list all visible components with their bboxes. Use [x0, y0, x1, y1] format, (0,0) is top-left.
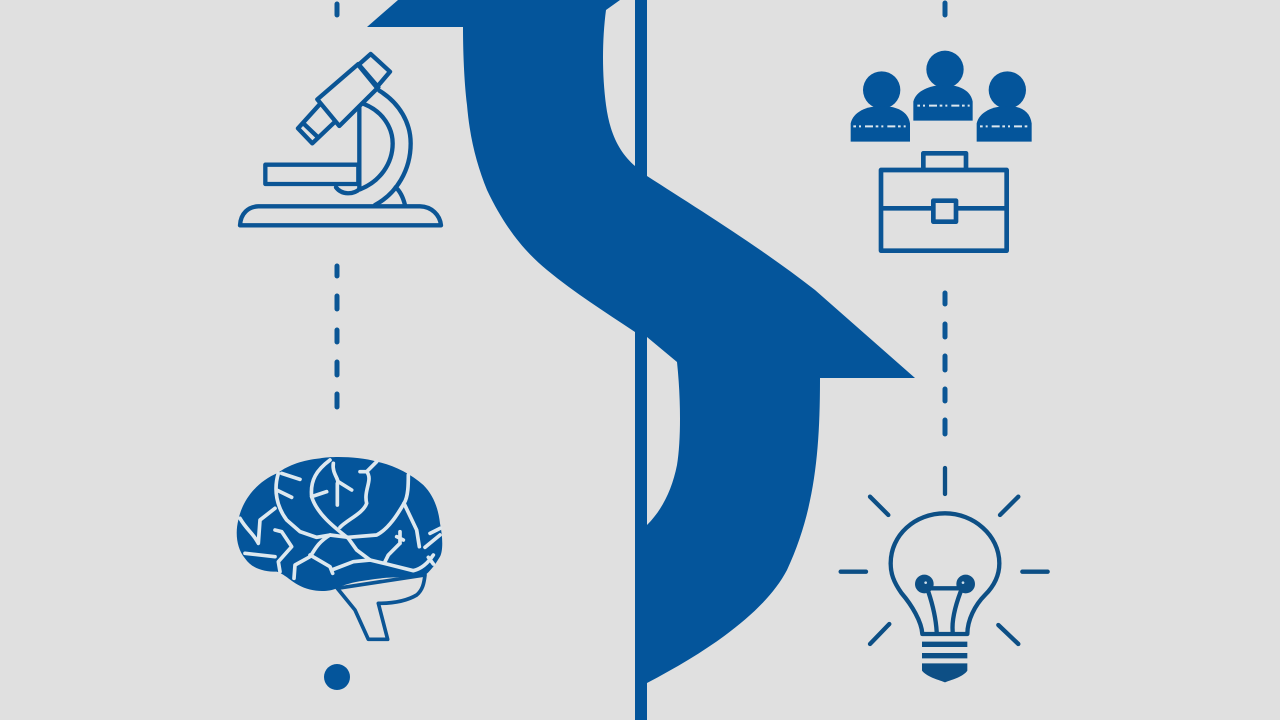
icon: three people [851, 51, 1032, 142]
person centre [913, 51, 973, 121]
icon: microscope [240, 54, 441, 225]
brain stem [337, 575, 425, 639]
central S-shaped double arrow with vertical bar [367, 0, 915, 720]
person right [977, 71, 1032, 142]
dot below brain [324, 664, 350, 690]
icon: briefcase [881, 153, 1007, 251]
bulb glass [891, 513, 999, 634]
left dashed connector [334, 4, 340, 407]
icon: light bulb [841, 468, 1048, 682]
brain silhouette [237, 457, 442, 591]
filament [915, 575, 975, 632]
person left [851, 71, 910, 142]
right dashed connector [942, 3, 948, 434]
icon: brain [237, 457, 442, 639]
brain folds [240, 460, 440, 578]
bulb screw base [922, 644, 967, 682]
light rays [841, 468, 1048, 644]
